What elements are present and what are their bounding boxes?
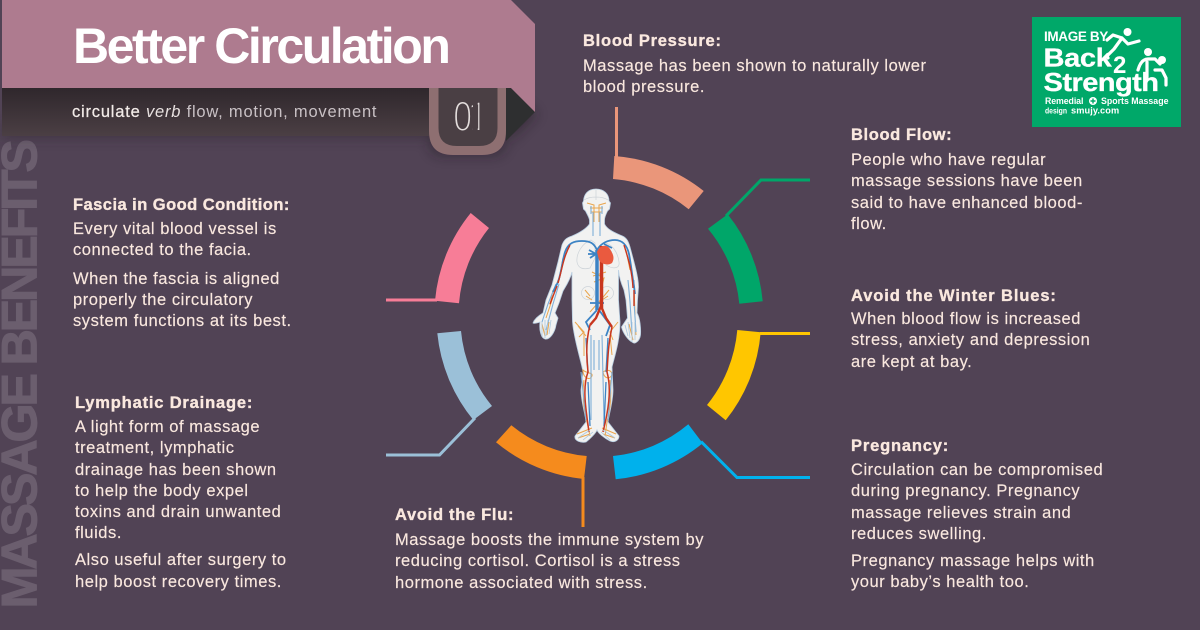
text block: lymphatic drainage: toxins and drain unwanted bbox=[75, 503, 281, 521]
text block: avoid the flu: Avoid the Flu: bbox=[395, 506, 514, 524]
logo plus sign bbox=[1089, 97, 1097, 105]
segment: fascia bbox=[386, 213, 489, 303]
text block: pregnancy bbox=[851, 437, 1103, 591]
text block: blood pressure: Massage has been shown to naturally lower bbox=[583, 57, 927, 75]
number 01: 1 bbox=[468, 97, 489, 140]
logo text: Sports Massage bbox=[1101, 96, 1169, 106]
main vein and aorta bbox=[595, 250, 599, 310]
text block: fascia in good condition: connected to the facia. bbox=[73, 241, 252, 259]
text block: lymphatic drainage: treatment, lymphatic bbox=[75, 439, 235, 457]
text block: fascia in good condition bbox=[73, 196, 292, 330]
logo running figure bbox=[1107, 28, 1139, 58]
logo panel bbox=[1032, 17, 1181, 127]
segment: blood flow bbox=[708, 180, 810, 304]
text block: pregnancy: Pregnancy: bbox=[851, 437, 949, 455]
segment: avoid the flu bbox=[496, 425, 587, 527]
title: Better Circulation bbox=[73, 18, 448, 74]
text block: avoid the winter blues: When blood flow is increased bbox=[851, 310, 1081, 328]
blue veins bbox=[542, 206, 636, 420]
text block: pregnancy: Circulation can be compromised bbox=[851, 461, 1103, 479]
human circulatory system figure bbox=[533, 189, 641, 442]
text block: fascia in good condition: Fascia in Good Condition: bbox=[73, 196, 290, 214]
logo text: Back bbox=[1044, 43, 1113, 72]
logo text: Remedial bbox=[1045, 96, 1083, 106]
segment: blood pressure bbox=[613, 107, 704, 209]
text block: blood flow: said to have enhanced blood- bbox=[851, 194, 1083, 212]
text block: blood flow: flow. bbox=[851, 215, 887, 233]
logo text: design bbox=[1045, 106, 1067, 116]
text block: pregnancy: reduces swelling. bbox=[851, 525, 987, 543]
ribbon fold bbox=[505, 88, 535, 141]
text block: pregnancy: Pregnancy massage helps with bbox=[851, 552, 1095, 570]
text block: pregnancy: during pregnancy. Pregnancy bbox=[851, 482, 1080, 500]
text block: avoid the winter blues: stress, anxiety and depression bbox=[851, 331, 1090, 349]
number 01: 0 bbox=[452, 97, 473, 140]
text block: pregnancy: your baby’s health too. bbox=[851, 573, 1029, 591]
body silhouette bbox=[533, 189, 641, 442]
text block: lymphatic drainage: Also useful after surgery to bbox=[75, 551, 287, 569]
text block: blood pressure: Blood Pressure: bbox=[583, 32, 722, 50]
heart bbox=[597, 246, 613, 264]
segment: pregnancy bbox=[613, 424, 810, 479]
logo text: Strength bbox=[1044, 68, 1158, 97]
text block: blood pressure: blood pressure. bbox=[583, 78, 705, 96]
text block: blood flow: massage sessions have been bbox=[851, 172, 1083, 190]
text block: avoid the flu: Massage boosts the immune system by bbox=[395, 531, 704, 549]
text block: avoid the winter blues: Avoid the Winter Blues: bbox=[851, 287, 1057, 305]
text block: blood flow: Blood Flow: bbox=[851, 126, 952, 144]
text block: blood flow: People who have regular bbox=[851, 151, 1046, 169]
hands and feet detail bbox=[542, 320, 635, 440]
text block: avoid the winter blues: are kept at bay. bbox=[851, 353, 972, 371]
text block: lymphatic drainage: Lymphatic Drainage: bbox=[75, 394, 253, 412]
text block: fascia in good condition: Every vital blood vessel is bbox=[73, 220, 277, 238]
text block: lymphatic drainage: to help the body expel bbox=[75, 482, 249, 500]
text block: blood pressure bbox=[583, 32, 927, 96]
text block: lymphatic drainage bbox=[75, 394, 287, 591]
number 01 bbox=[455, 102, 480, 130]
text block: fascia in good condition: properly the circulatory bbox=[73, 291, 253, 309]
text block: avoid the flu: hormone associated with stress. bbox=[395, 574, 648, 592]
segment: winter blues bbox=[707, 330, 810, 420]
logo text: smujy.com bbox=[1071, 106, 1119, 116]
title ribbon bbox=[2, 0, 535, 112]
logo text: 2 bbox=[1113, 52, 1126, 79]
orange capillaries bbox=[542, 203, 636, 438]
logo text: IMAGE BY bbox=[1044, 29, 1108, 44]
text block: lymphatic drainage: drainage has been shown bbox=[75, 461, 277, 479]
text block: lymphatic drainage: help boost recovery times. bbox=[75, 573, 282, 591]
text block: pregnancy: massage relieves strain and bbox=[851, 504, 1071, 522]
text block: avoid the winter blues bbox=[851, 287, 1090, 371]
segment: lymphatic drainage bbox=[386, 331, 492, 455]
header shadow bbox=[2, 90, 538, 156]
text block: lymphatic drainage: fluids. bbox=[75, 524, 122, 542]
text block: avoid the flu bbox=[395, 506, 704, 592]
number tab bbox=[429, 88, 506, 155]
logo massage figures bbox=[1138, 48, 1166, 85]
lungs and kidneys outlines bbox=[577, 190, 619, 300]
text block: avoid the flu: reducing cortisol. Cortisol is a stress bbox=[395, 552, 681, 570]
text block: fascia in good condition: When the fascia is aligned bbox=[73, 270, 280, 288]
subtitle bar bbox=[2, 88, 432, 136]
subtitle definition: circulate verb flow, motion, movement bbox=[72, 103, 377, 121]
text block: lymphatic drainage: A light form of massage bbox=[75, 418, 260, 436]
text block: fascia in good condition: system functions at its best. bbox=[73, 312, 292, 330]
text block: blood flow bbox=[851, 126, 1083, 233]
logo text bbox=[1044, 29, 1169, 116]
ring diagram bbox=[386, 107, 810, 527]
